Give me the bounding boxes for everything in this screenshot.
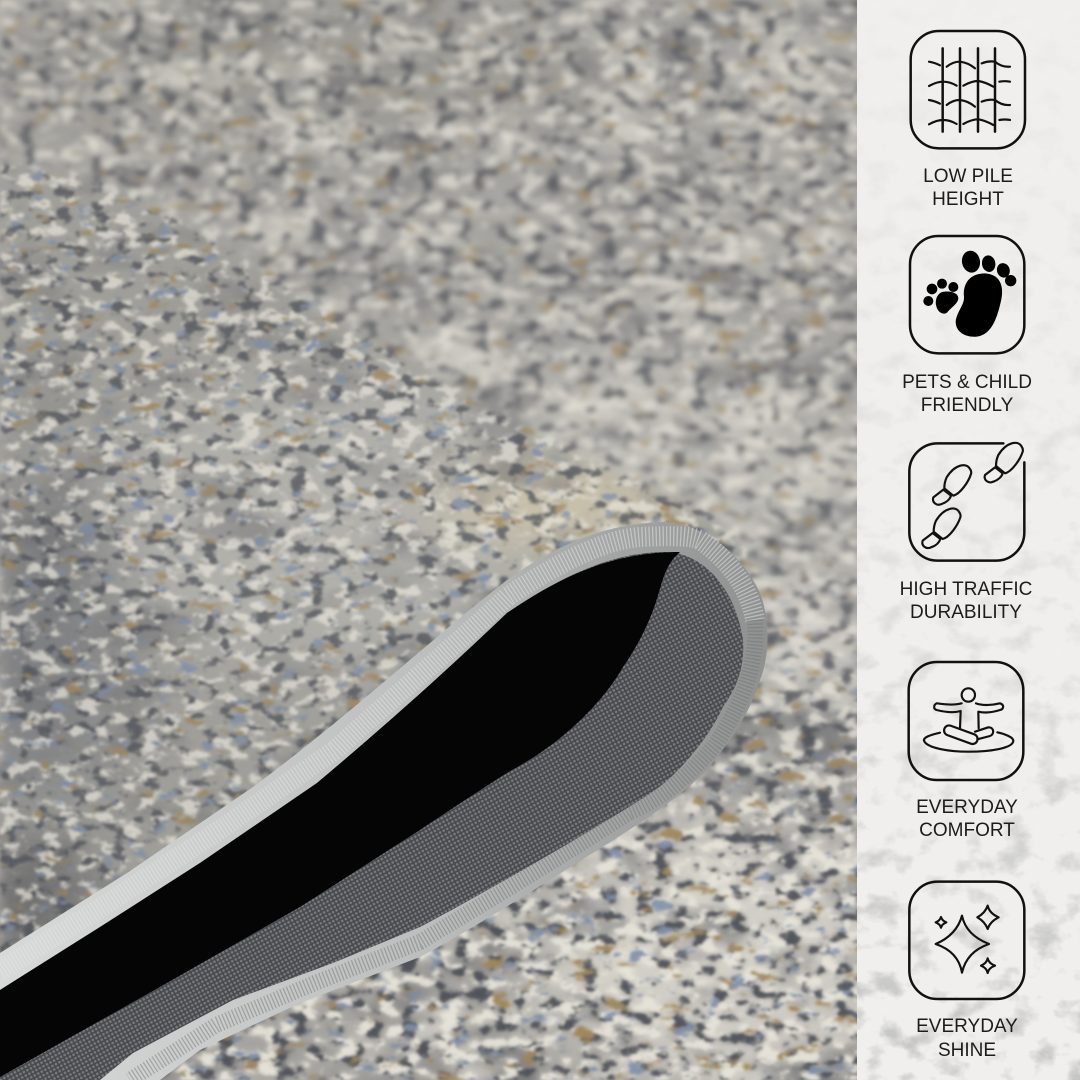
label: pets and child friendly: FRIENDLY: [921, 395, 1014, 416]
panel: features sidebar: [857, 0, 1080, 1080]
label: everyday shine: EVERYDAY: [916, 1016, 1018, 1037]
label: low pile height: HEIGHT: [932, 189, 1004, 210]
icon: paw and footprint: [910, 236, 1024, 353]
label: everyday comfort: COMFORT: [919, 820, 1015, 841]
label: everyday shine: [916, 1016, 1018, 1061]
label: low pile height: LOW PILE: [923, 166, 1013, 187]
label: low pile height: [923, 166, 1013, 210]
label: everyday comfort: [916, 797, 1018, 841]
feature: everyday comfort: [909, 662, 1023, 841]
icon: pile fibers: [911, 31, 1025, 148]
gray backing: [0, 552, 743, 1080]
label: high traffic durability: DURABILITY: [910, 602, 1022, 623]
icon: sparkles: [909, 882, 1024, 999]
outer binding edge: [0, 522, 768, 1080]
top binding ribs: [0, 536, 755, 971]
feature: pets and child friendly: [902, 236, 1032, 416]
feature: everyday shine: [909, 882, 1024, 1061]
photo: rolled rug top surface: [0, 162, 752, 946]
rug underside with binding: [0, 522, 768, 1080]
feature: high traffic durability: [900, 443, 1032, 623]
label: high traffic durability: HIGH TRAFFIC: [900, 579, 1032, 600]
icon: seated figure: [909, 662, 1023, 780]
label: high traffic durability: [900, 579, 1032, 623]
icon: shoe prints: [909, 443, 1024, 561]
label: pets and child friendly: PETS & CHILD: [902, 372, 1032, 393]
label: everyday shine: SHINE: [938, 1040, 996, 1061]
feature: low pile height: [911, 31, 1025, 210]
label: everyday comfort: EVERYDAY: [916, 797, 1018, 818]
lower binding ribs: [130, 620, 755, 1080]
label: pets and child friendly: [902, 372, 1032, 416]
black shadowed hollow: [0, 552, 680, 1077]
